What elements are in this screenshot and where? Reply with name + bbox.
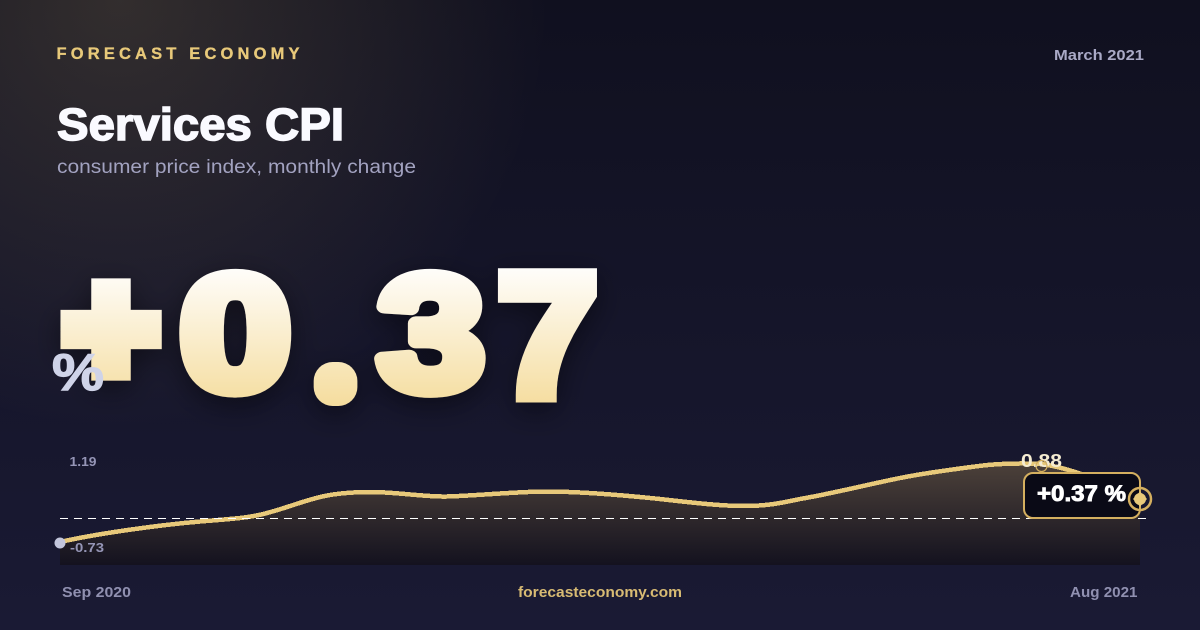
- big value: 0: [180, 244, 291, 424]
- end date: Aug 2021: [1070, 584, 1138, 601]
- big value: 7: [498, 239, 597, 432]
- subtitle: consumer price index, monthly change: [57, 157, 416, 178]
- peak marker: [1036, 460, 1047, 472]
- sparkline chart: [54, 451, 1151, 565]
- big value: .: [330, 352, 341, 396]
- end marker: [1129, 488, 1151, 510]
- date: March 2021: [1054, 47, 1144, 64]
- trend line: [60, 464, 1140, 542]
- start marker: [54, 538, 66, 548]
- big value: 3: [378, 243, 484, 424]
- area fill: [60, 464, 1140, 565]
- value callout: +0.37 %: [1037, 481, 1126, 506]
- start date: Sep 2020: [62, 584, 131, 601]
- title: Services CPI: [57, 99, 344, 150]
- axis min label: -0.73: [70, 540, 104, 555]
- big value: +: [65, 240, 157, 416]
- peak label: 0.88: [1021, 451, 1062, 471]
- brand label: FORECAST ECONOMY: [56, 45, 300, 63]
- axis max label: 1.19: [70, 454, 96, 469]
- big value: [65, 239, 597, 432]
- website: forecasteconomy.com: [518, 584, 682, 601]
- percent unit: %: [52, 344, 104, 402]
- value callout: [1024, 473, 1140, 518]
